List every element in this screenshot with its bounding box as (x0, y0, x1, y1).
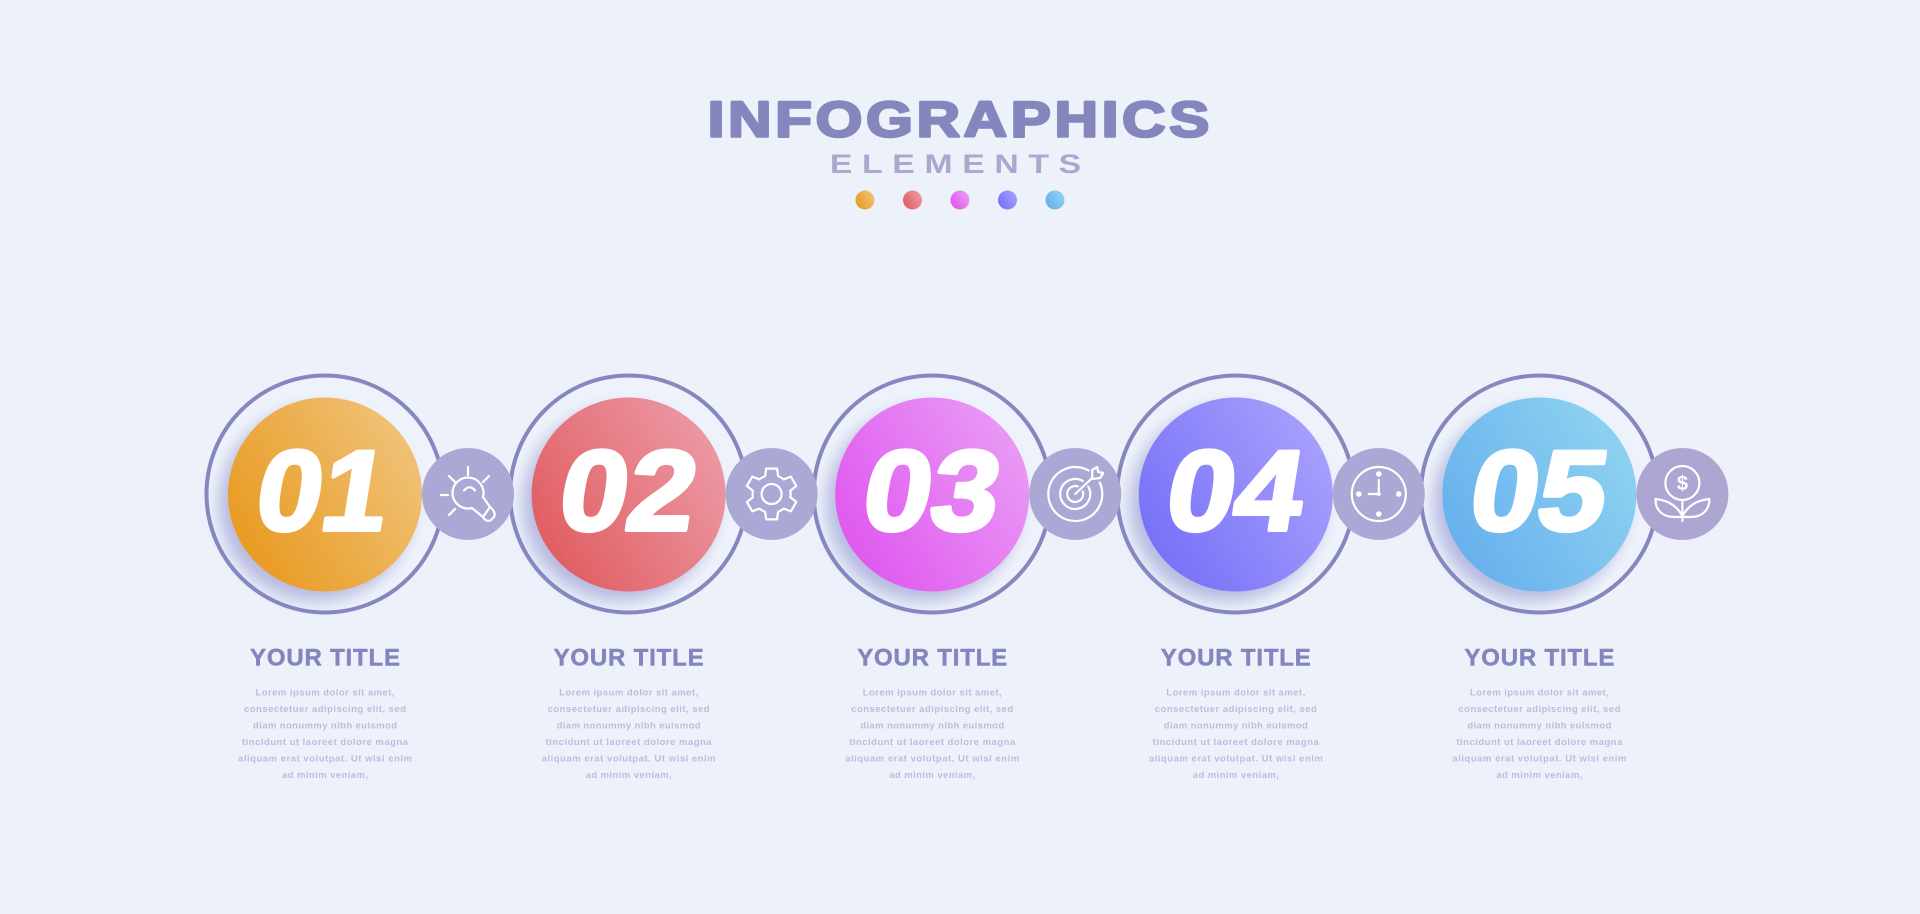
caption title: YOUR TITLE (1464, 644, 1614, 672)
gradient disc (1139, 398, 1333, 592)
caption body: Lorem ipsum dolor sit amet, (863, 688, 1002, 698)
subtitle: ELEMENTS (830, 149, 1081, 179)
caption body (542, 688, 716, 781)
caption body: aliquam erat volutpat. Ut wisi enim (1149, 754, 1323, 764)
icon: target with arrow (1029, 448, 1121, 540)
title: INFOGRAPHICS (708, 91, 1209, 147)
icon: gear (726, 448, 818, 540)
icon: clock (1333, 448, 1425, 540)
caption body: Lorem ipsum dolor sit amet, (1166, 688, 1305, 698)
caption body: ad minim veniam, (1193, 770, 1279, 781)
gradient disc (835, 398, 1029, 592)
caption title: YOUR TITLE (857, 644, 1007, 672)
caption body: diam nonummy nibh euismod (860, 720, 1004, 732)
caption body: consectetuer adipiscing elit, sed (851, 704, 1013, 715)
caption body: aliquam erat volutpat. Ut wisi enim (1452, 754, 1626, 764)
gradient disc (532, 398, 726, 592)
caption body: Lorem ipsum dolor sit amet, (559, 688, 698, 698)
panel: step 03 (814, 376, 1121, 781)
caption body: aliquam erat volutpat. Ut wisi enim (845, 754, 1019, 764)
colour dots (856, 190, 1064, 210)
ring (814, 376, 1051, 612)
ring (1421, 376, 1658, 612)
caption body: aliquam erat volutpat. Ut wisi enim (238, 754, 412, 764)
caption title: YOUR TITLE (1161, 644, 1311, 672)
caption body: ad minim veniam, (282, 770, 368, 781)
ring (206, 376, 444, 612)
caption body: diam nonummy nibh euismod (557, 720, 701, 732)
caption body: tincidunt ut laoreet dolore magna (546, 737, 712, 748)
caption body: tincidunt ut laoreet dolore magna (242, 737, 409, 748)
gradient disc (228, 398, 422, 592)
panel: step 02 (510, 376, 818, 781)
icon: light bulb (422, 448, 514, 540)
ring (1117, 376, 1354, 612)
number: 02 (551, 428, 706, 555)
caption body: aliquam erat volutpat. Ut wisi enim (542, 754, 716, 764)
number: 01 (248, 428, 398, 555)
gradient disc (1442, 398, 1636, 592)
caption body: Lorem ipsum dolor sit amet, (1470, 688, 1609, 698)
panel: step 05 (1421, 376, 1728, 781)
caption body: consectetuer adipiscing elit, sed (548, 704, 710, 715)
caption body: ad minim veniam, (889, 770, 975, 781)
caption body: consectetuer adipiscing elit, sed (244, 704, 406, 715)
ring (510, 376, 747, 612)
panel: step 04 (1117, 376, 1425, 781)
caption body: diam nonummy nibh euismod (253, 720, 397, 732)
caption body: ad minim veniam, (1496, 770, 1582, 781)
caption body: tincidunt ut laoreet dolore magna (1153, 737, 1320, 748)
number: 05 (1462, 428, 1617, 555)
panel: step 01 (206, 376, 514, 781)
caption title: YOUR TITLE (554, 644, 704, 672)
caption body (1452, 688, 1626, 781)
caption body (845, 688, 1019, 781)
caption body: diam nonummy nibh euismod (1164, 720, 1308, 732)
number: 04 (1158, 428, 1314, 555)
caption body: tincidunt ut laoreet dolore magna (1456, 737, 1623, 748)
number: 03 (855, 428, 1010, 555)
caption title: YOUR TITLE (250, 644, 400, 672)
caption body (238, 688, 412, 781)
caption body: Lorem ipsum dolor sit amet, (256, 688, 394, 698)
caption body: ad minim veniam, (586, 770, 672, 781)
caption body: consectetuer adipiscing elit, sed (1155, 704, 1317, 715)
icon: plant with dollar coin: $ (1677, 473, 1688, 495)
icon: plant with dollar coin (1636, 448, 1728, 540)
caption body (1149, 688, 1323, 781)
header (708, 91, 1209, 210)
caption body: diam nonummy nibh euismod (1467, 720, 1612, 732)
caption body: tincidunt ut laoreet dolore magna (849, 737, 1016, 748)
caption body: consectetuer adipiscing elit, sed (1458, 704, 1621, 715)
